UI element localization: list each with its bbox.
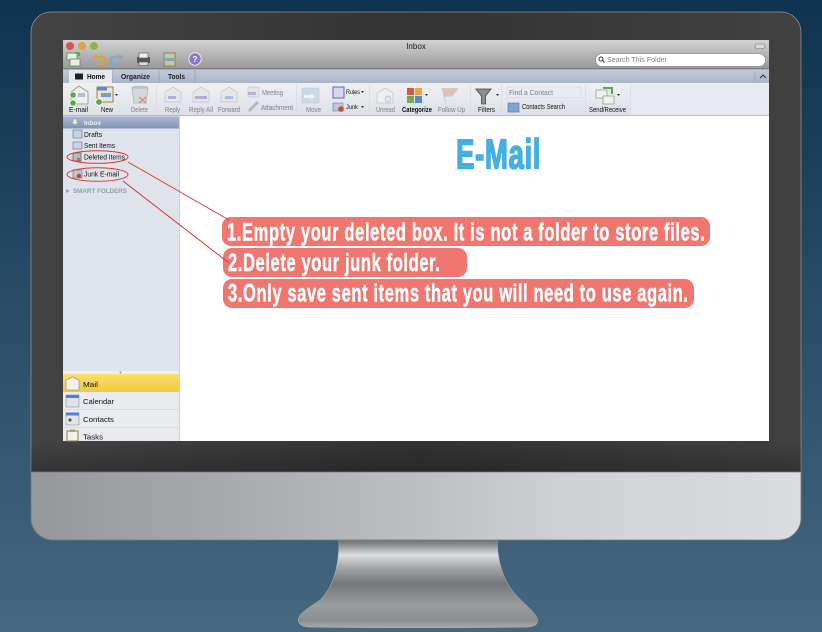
meeting and attachment buttons: Meeting (262, 88, 283, 97)
ribbon (63, 83, 769, 116)
delete button (131, 86, 148, 114)
inbox row (63, 116, 179, 128)
move button: Move (306, 105, 321, 114)
home tab: Home (87, 72, 105, 81)
sent items row (73, 141, 115, 150)
navigation: tasks: Tasks (83, 432, 103, 442)
junk e-mail row: Junk E-mail (84, 170, 119, 178)
rules and junk buttons: Junk (346, 104, 359, 111)
e-mail and new buttons (69, 86, 118, 114)
callout marker: junk e-mail (67, 168, 128, 181)
e-mail and new buttons: E-mail (69, 105, 88, 114)
monitor stand (298, 539, 538, 628)
send and receive button: Send/Receive (589, 105, 626, 114)
navigation: contacts (63, 410, 179, 428)
organize tab: Organize (121, 72, 150, 81)
sidebar splitter (63, 371, 179, 374)
toolbar icons: ? (193, 55, 198, 64)
e-mail and new buttons: New (101, 105, 114, 114)
filters button (476, 89, 499, 114)
navigation: tasks (63, 428, 179, 442)
reply buttons: Forward (218, 105, 240, 114)
delete button: Delete (131, 105, 148, 114)
follow up button: Follow Up (438, 105, 465, 114)
collapse arrow (760, 75, 766, 78)
navigation: mail: Mail (83, 380, 98, 389)
navigation: calendar (63, 392, 179, 410)
inbox row: Inbox (84, 120, 101, 127)
search field (596, 54, 766, 66)
drafts row: Drafts (84, 130, 102, 139)
window background (63, 40, 769, 441)
search field: Search This Folder (607, 55, 668, 64)
arrow: junk e-mail to tip 2 (123, 181, 229, 263)
ribbon tabs (63, 70, 769, 84)
rules and junk buttons (333, 87, 364, 112)
meeting and attachment buttons: Attachment (261, 103, 293, 112)
navigation: contacts: Contacts (83, 415, 114, 424)
folder sidebar (63, 116, 180, 442)
toolbar icons (67, 53, 201, 66)
bezel (31, 12, 801, 473)
meeting and attachment buttons (248, 87, 293, 112)
reply buttons: Reply (165, 105, 180, 114)
smart folders heading: SMART FOLDERS (73, 188, 127, 195)
monitor body (31, 12, 801, 540)
reply buttons: Reply All (189, 105, 213, 114)
tip 1: 1.Empty your deleted box. It is not a folder to store files. (227, 219, 705, 246)
categorize button: Categorize (402, 107, 432, 114)
rules and junk buttons: Rules (346, 89, 361, 96)
traffic lights (66, 42, 98, 50)
send and receive button (589, 88, 626, 114)
title bar and toolbar (63, 40, 769, 69)
window resize pill (755, 44, 765, 48)
email application window (63, 40, 769, 442)
unread button (376, 88, 395, 114)
navigation: calendar: Calendar (83, 397, 115, 406)
deleted items row: Deleted Items (84, 152, 125, 162)
categorize button (402, 88, 432, 114)
tip 2: 2.Delete your junk folder. (228, 250, 440, 277)
navigation: mail (63, 374, 179, 392)
title: E-Mail (456, 131, 540, 178)
follow up button (438, 88, 465, 114)
sent items row: Sent Items (84, 141, 115, 150)
drafts row (73, 130, 102, 139)
move button (302, 88, 321, 114)
unread button: Unread (376, 105, 395, 114)
contact search: Find a Contact (509, 88, 553, 97)
bezel shade (31, 441, 801, 472)
reply buttons (165, 87, 240, 114)
arrow: deleted items to tip 1 (128, 162, 229, 220)
callout marker: deleted items (67, 151, 128, 163)
window title: Inbox (406, 42, 426, 51)
tip 3: 3.Only save sent items that you will need to use again. (228, 280, 688, 307)
contact search (507, 87, 581, 112)
home tab (69, 70, 112, 84)
silver chin (31, 472, 801, 540)
contact search: Contacts Search (522, 102, 565, 111)
filters button: Filters (478, 105, 495, 114)
tools tab: Tools (168, 72, 185, 81)
